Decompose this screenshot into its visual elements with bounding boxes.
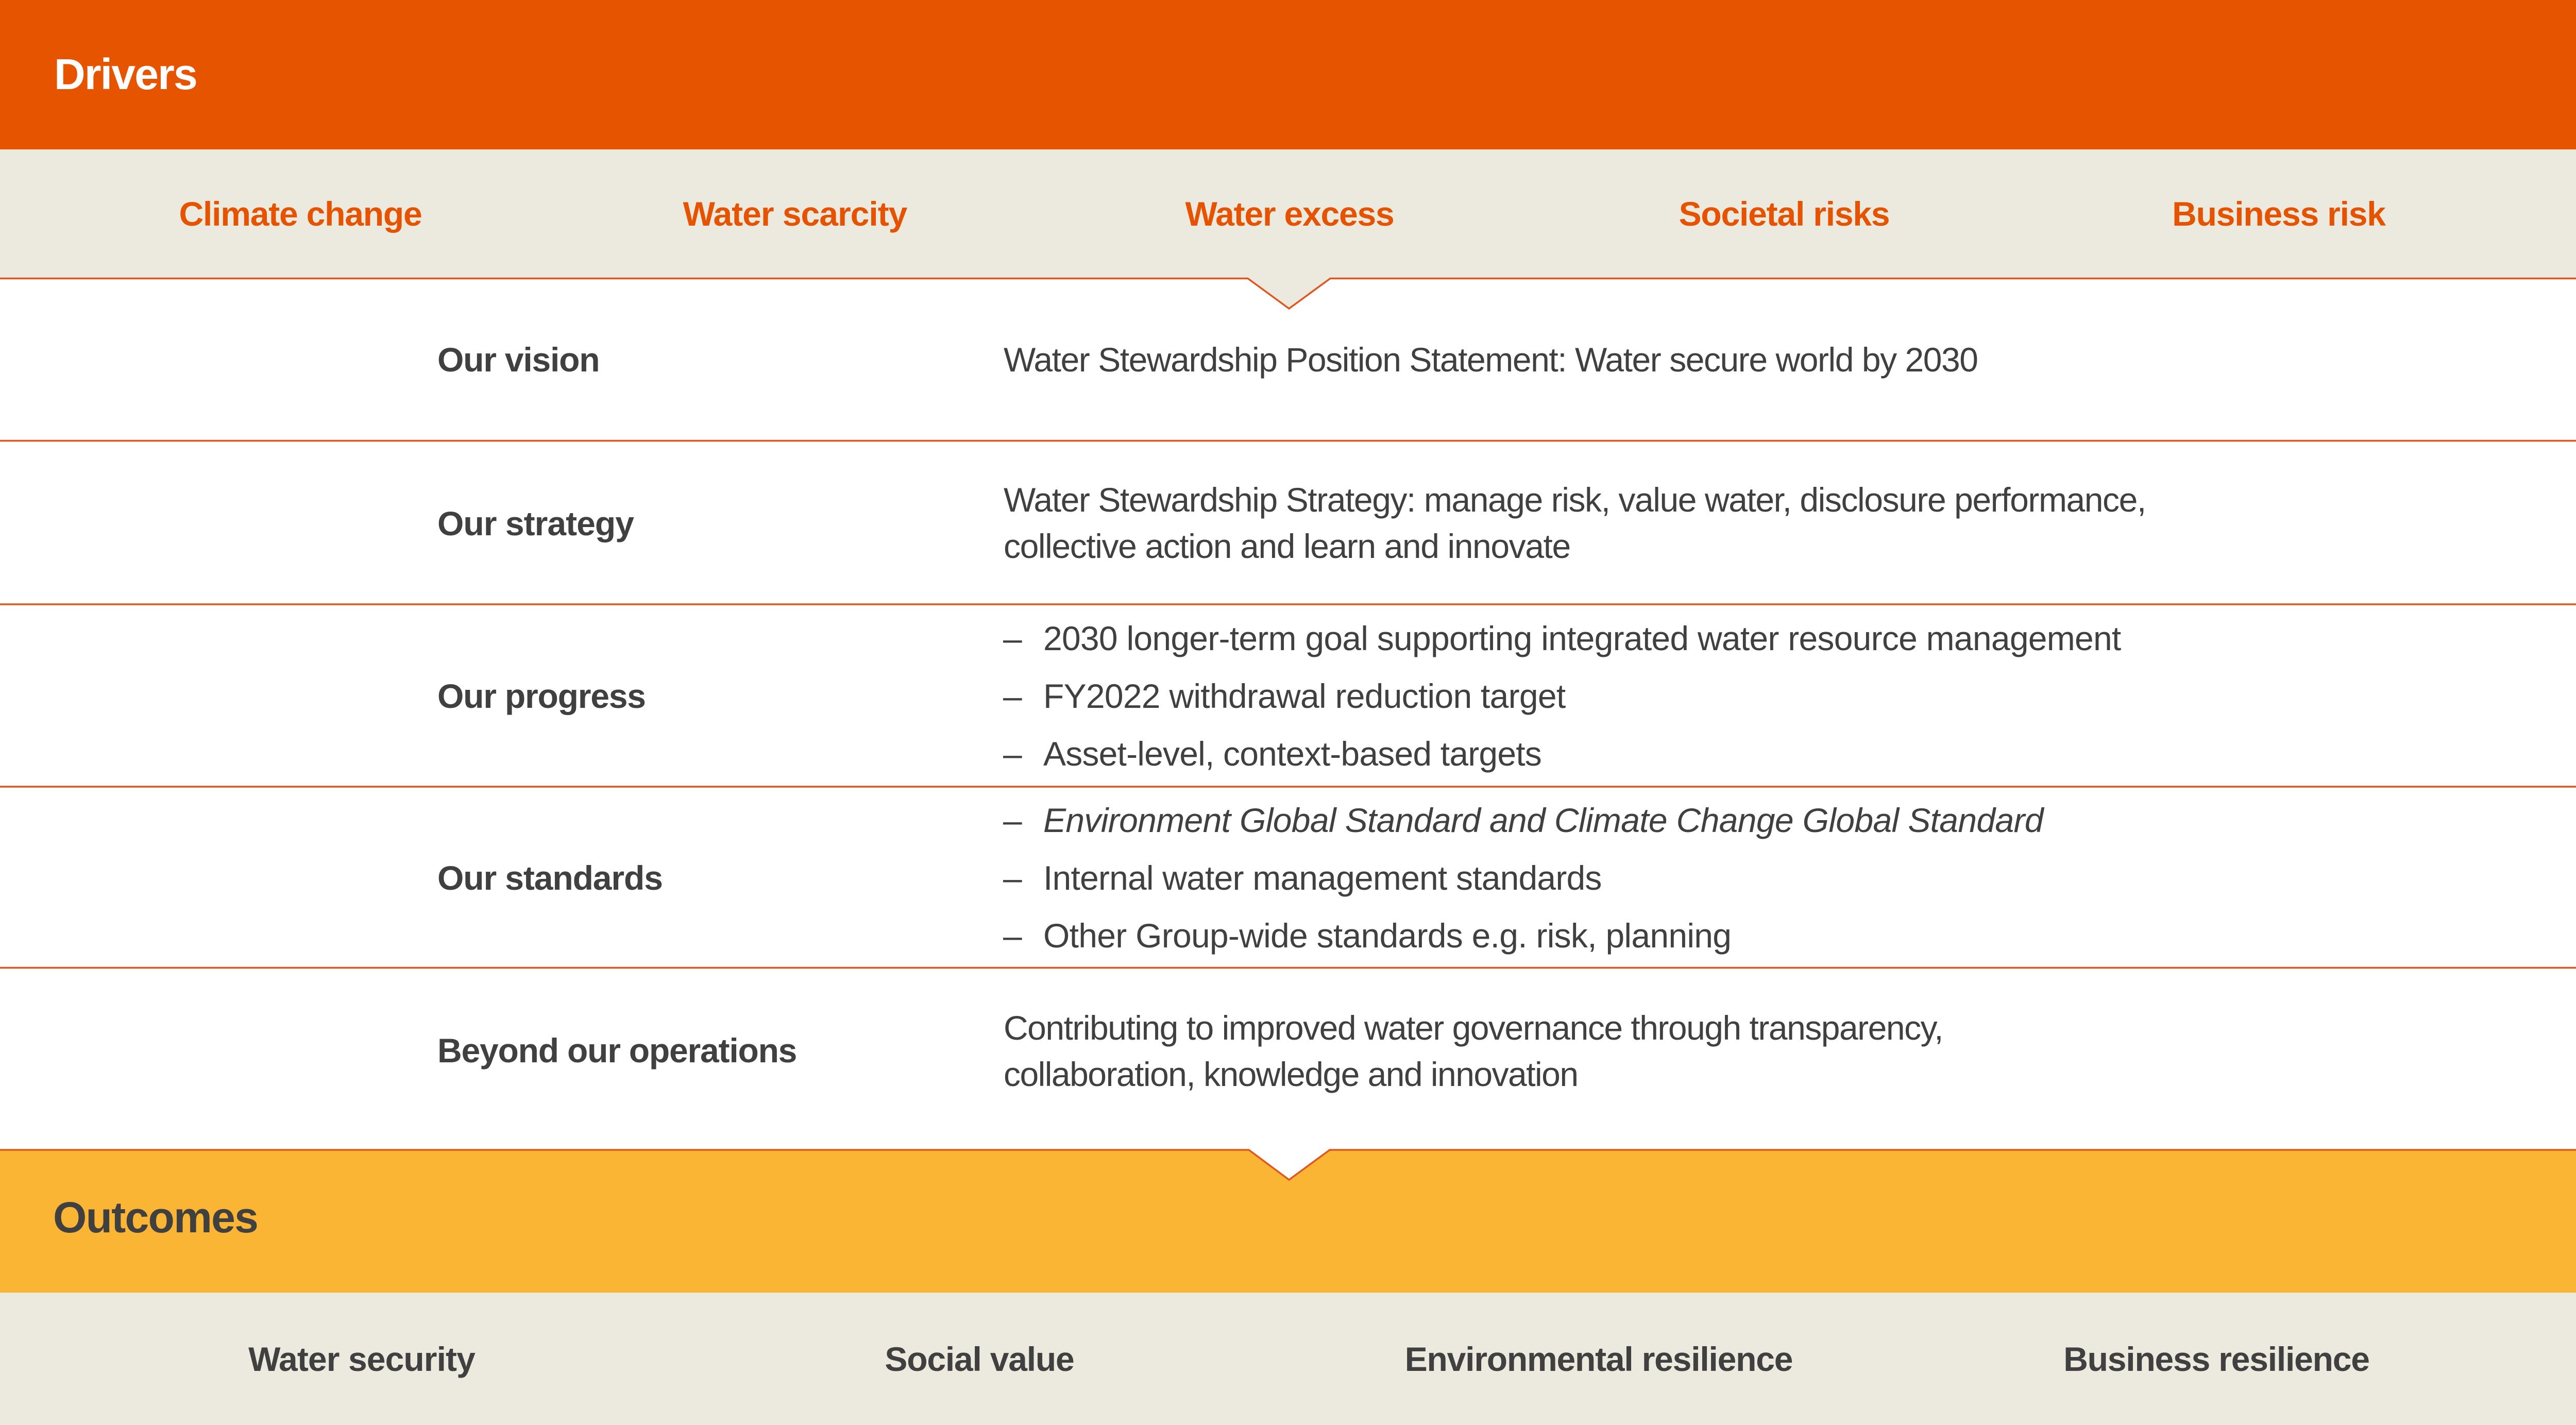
list: progress items: Asset-level, context-based targets <box>1043 735 1541 773</box>
driver: Climate change: Climate change <box>179 195 422 233</box>
row: our progress <box>437 619 2121 773</box>
outcome: Environmental resilience: Environmental resilience <box>1405 1340 1792 1378</box>
list: progress items: 2030 longer-term goal supporting integrated water resource management <box>1043 619 2121 657</box>
label: Our strategy: Our strategy <box>437 504 634 542</box>
panel: drivers list <box>0 149 2576 309</box>
text: beyond statement: collaboration, knowledge and innovation <box>1004 1055 1578 1093</box>
panel: outcomes header <box>0 1150 2576 1293</box>
list: standards items: – <box>1003 801 1022 839</box>
label: Our standards: Our standards <box>437 859 663 897</box>
text: beyond statement: Contributing to improved water governance through transparency, <box>1004 1009 1943 1047</box>
list: standards items: Internal water management standards <box>1043 859 1602 897</box>
label: Our progress: Our progress <box>437 677 646 715</box>
outcome: Water security: Water security <box>248 1340 476 1378</box>
text: strategy statement <box>1004 481 2146 565</box>
list: progress items: – <box>1003 735 1022 773</box>
panel: drivers header <box>0 0 2576 149</box>
heading: Drivers: Drivers <box>54 50 197 98</box>
panel: outcomes list <box>0 1293 2576 1425</box>
row: beyond our operations <box>437 1009 1943 1093</box>
driver: Societal risks: Societal risks <box>1679 195 1889 233</box>
list: standards items: Other Group-wide standards e.g. risk, planning <box>1043 917 1731 955</box>
list: progress items: – <box>1003 677 1022 715</box>
list: progress items: – <box>1003 619 1022 657</box>
arrow: outcomes chevron line <box>0 1150 2576 1180</box>
row: our standards <box>437 801 2045 955</box>
heading: Outcomes: Outcomes <box>53 1193 258 1242</box>
driver: Water excess: Water excess <box>1185 195 1394 233</box>
driver: Business risk: Business risk <box>2172 195 2386 233</box>
list: progress items: FY2022 withdrawal reduction target <box>1043 677 1566 715</box>
list: standards items: – <box>1003 859 1022 897</box>
text: strategy statement: Water Stewardship Strategy: manage risk, value water, disclosure performance, <box>1004 481 2146 519</box>
list: standards items <box>1003 801 2045 955</box>
label: Our vision: Our vision <box>437 341 599 379</box>
row: our strategy <box>437 481 2146 565</box>
text: beyond statement <box>1004 1009 1943 1093</box>
label: Beyond our operations: Beyond our operations <box>437 1031 796 1070</box>
list: standards items: Environment Global Standard and Climate Change Global Standard <box>1043 801 2045 839</box>
outcome: Social value: Social value <box>885 1340 1074 1378</box>
list: standards items: – <box>1003 917 1022 955</box>
text: strategy statement: collective action and learn and innovate <box>1004 527 1570 565</box>
row: our vision <box>437 341 1978 379</box>
arrow: drivers down chevron line <box>0 278 2576 309</box>
text: vision statement: Water Stewardship Position Statement: Water secure world by 2030 <box>1004 341 1978 379</box>
outcome: Business resilience: Business resilience <box>2063 1340 2369 1378</box>
list: progress items <box>1003 619 2121 773</box>
driver: Water scarcity: Water scarcity <box>683 195 908 233</box>
